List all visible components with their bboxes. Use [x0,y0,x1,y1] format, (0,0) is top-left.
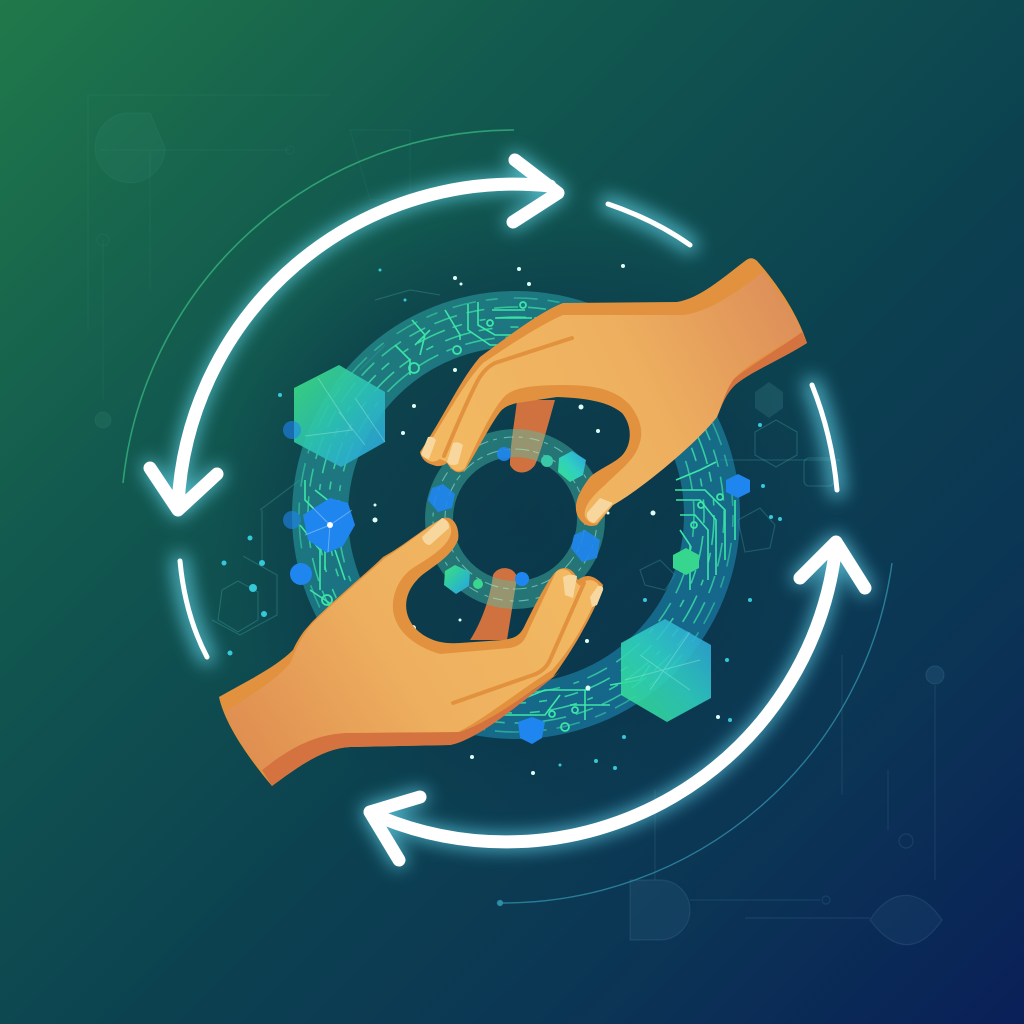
thin orbit arc: green [123,130,514,483]
ring circuit texture [299,298,735,732]
inner circuit ring [433,437,597,601]
thin orbit arc: blue [498,563,892,906]
arrow: left arc, top arrowhead [178,160,558,505]
blue gem nodes [283,421,750,744]
lower hand: dark wrist underside [262,672,560,786]
upper hand: light skin [422,272,802,523]
arrow: right arc, top arrowhead [375,542,865,842]
back finger of upper hand [510,400,555,472]
lower hand: shadow edge [219,518,603,786]
faint tech decoration: top left [88,95,410,428]
central dark vignette [216,215,816,815]
hexagon: blue gem left [303,498,355,553]
arrow: bottom arrowhead [370,797,420,860]
back finger of lower hand [470,568,517,640]
upper hand: shadow edge [420,258,807,526]
upper hand: dark wrist underside [717,332,807,417]
outer circuit ring [299,298,735,732]
hexagon network outlines [212,290,840,635]
lower hand: light skin [225,520,600,770]
upper hand [420,258,807,526]
upper hand: crease [444,338,572,456]
arrow: left arrowhead [150,468,217,510]
faint tech decoration: bottom right [630,655,944,945]
dashed orbit segments [180,204,837,657]
particles [372,264,720,775]
hexagon: large blue-green cube bottom right [621,619,711,722]
arrow glow [150,160,865,860]
upper hand: nails [421,437,613,523]
lower hand: nails [422,518,603,607]
ghost hexagon: right [755,382,783,418]
lower hand: crease [453,583,584,703]
hexagon: large green-blue cube top left [294,365,385,467]
lower hand [219,518,603,786]
inner ring small green hexagons [444,451,699,594]
